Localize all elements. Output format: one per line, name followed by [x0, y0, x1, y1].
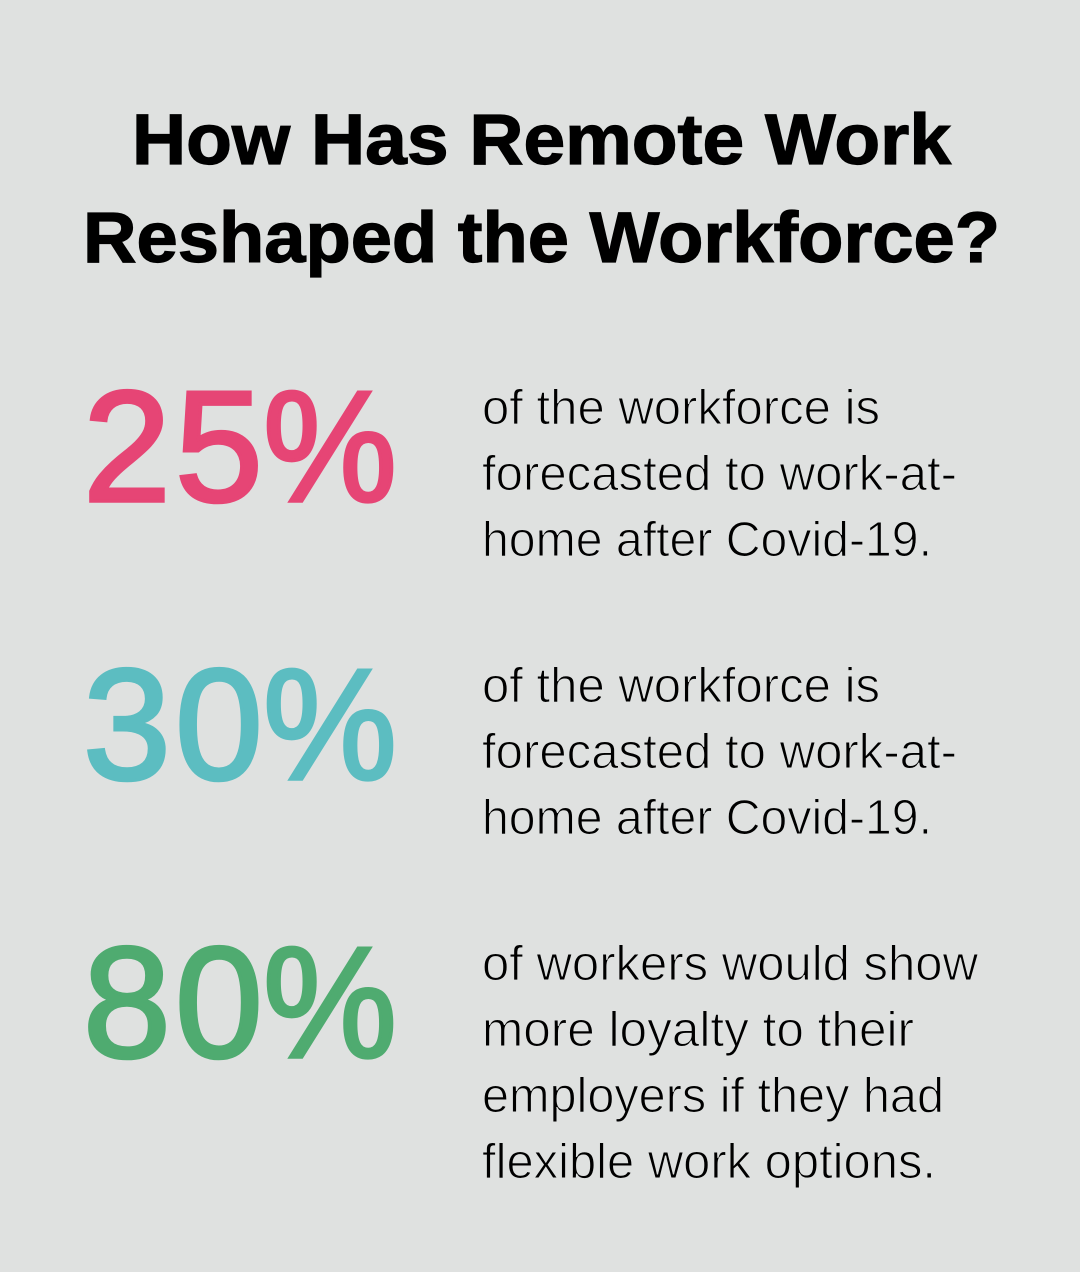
text: 80% description: more loyalty to their: [482, 1003, 914, 1057]
text: 80% description: employers if they had: [482, 1069, 944, 1123]
number: 30%: 30: [83, 637, 263, 813]
number: 25%: [83, 359, 397, 535]
panel: statistic 80%: [83, 915, 979, 1189]
number: 25%: %: [263, 359, 397, 535]
text: 25% description: of the workforce is: [482, 381, 880, 435]
panel: statistic 25%: [83, 359, 957, 567]
text: 30% description: of the workforce is: [482, 659, 880, 713]
number: 25%: 25: [83, 359, 263, 535]
number: 30%: [83, 637, 397, 813]
title: Reshaped the Workforce?: [83, 199, 1000, 278]
text: 25% description: [482, 381, 957, 567]
number: 80%: %: [263, 915, 397, 1091]
number: 80%: 80: [83, 915, 263, 1091]
text: 80% description: flexible work options.: [482, 1135, 936, 1189]
text: 25% description: forecasted to work-at-: [482, 447, 957, 501]
text: 30% description: forecasted to work-at-: [482, 725, 957, 779]
text: 80% description: [482, 937, 979, 1189]
text: 30% description: [482, 659, 957, 845]
panel: statistic 30%: [83, 637, 957, 845]
number: 30%: %: [263, 637, 397, 813]
title: How Has Remote Work: [132, 101, 952, 180]
text: 80% description: of workers would show: [482, 937, 979, 991]
number: 80%: [83, 915, 397, 1091]
text: 30% description: home after Covid-19.: [482, 791, 932, 845]
text: 25% description: home after Covid-19.: [482, 513, 932, 567]
title: [83, 101, 1000, 278]
